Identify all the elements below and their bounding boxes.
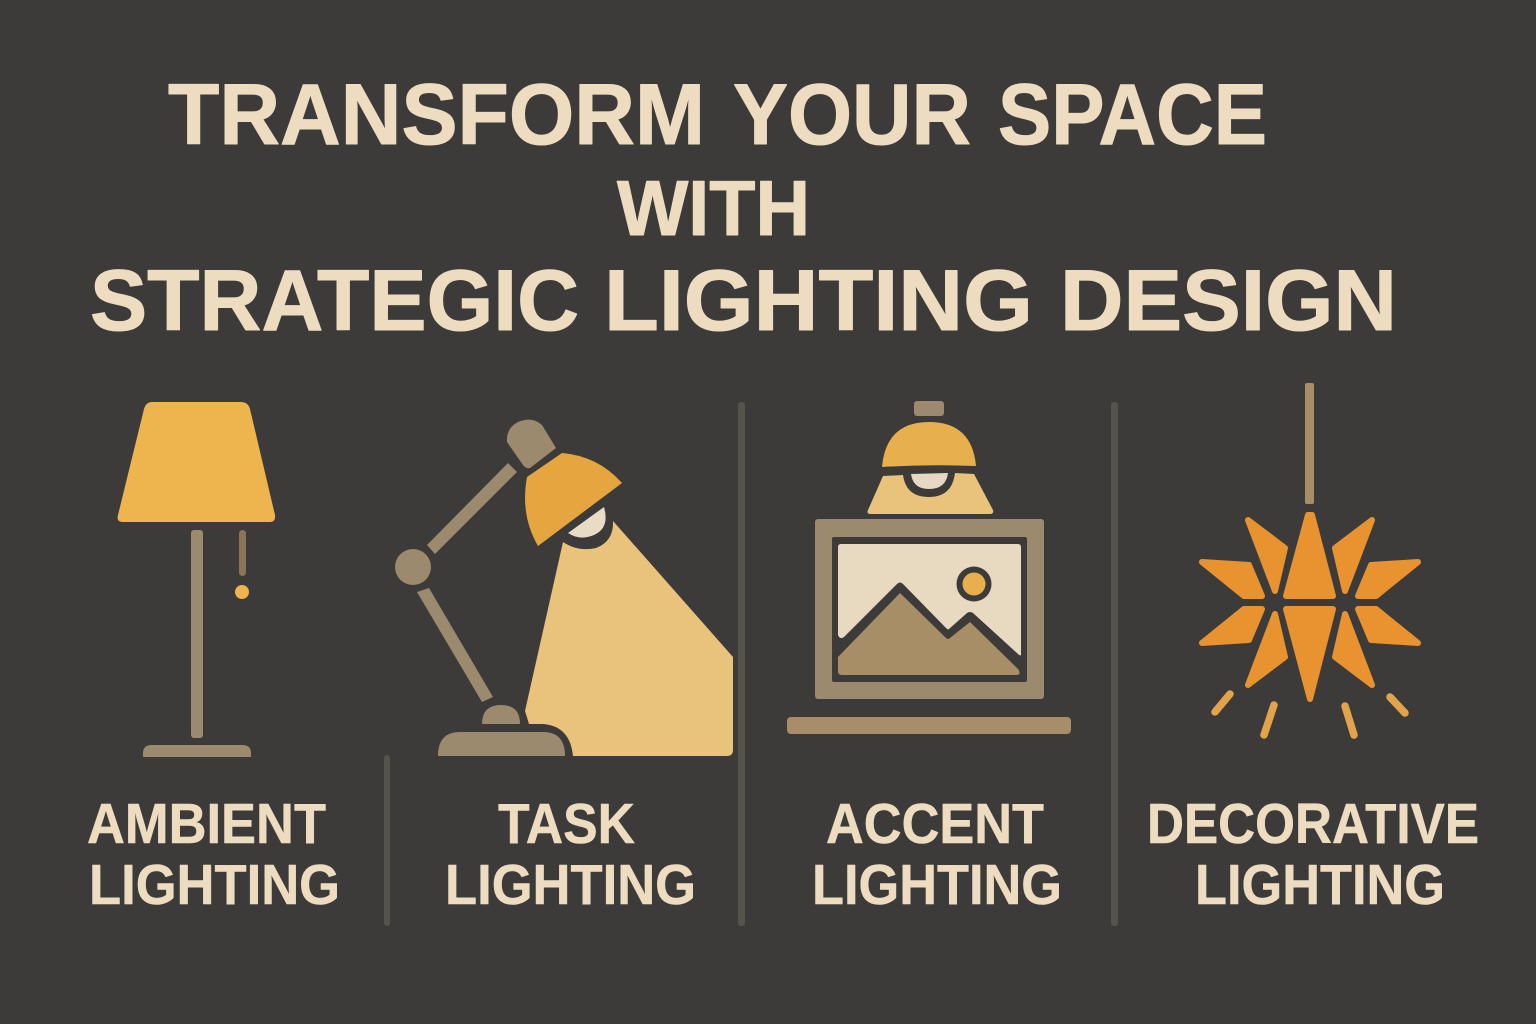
panel: accent lighting	[787, 401, 1071, 917]
icon: desk lamp	[395, 420, 733, 756]
label: decorative lighting	[1147, 792, 1479, 917]
panel: task lighting	[395, 420, 733, 917]
label: accent lighting: ACCENT	[826, 792, 1044, 856]
icon: floor lamp	[118, 402, 275, 757]
title: SPACE	[998, 67, 1267, 163]
label: accent lighting: LIGHTING	[812, 853, 1062, 917]
title	[90, 67, 1397, 349]
title: WITH	[617, 164, 810, 252]
title: DESIGN	[1060, 253, 1397, 349]
label: ambient lighting: AMBIENT	[87, 792, 326, 856]
title: LIGHTING	[604, 253, 1033, 349]
icon: star pendant	[1202, 383, 1418, 735]
title: TRANSFORM	[168, 67, 705, 163]
panel: ambient lighting	[87, 402, 340, 917]
title: STRATEGIC	[90, 253, 579, 349]
label: ambient lighting: LIGHTING	[89, 853, 340, 917]
label: task lighting: TASK	[498, 792, 635, 856]
label: task lighting: LIGHTING	[445, 853, 696, 917]
label: decorative lighting: DECORATIVE	[1147, 792, 1479, 856]
icon: picture light and framed picture	[787, 401, 1071, 734]
title: YOUR	[733, 67, 971, 163]
label: task lighting	[445, 792, 696, 917]
label: ambient lighting	[87, 792, 340, 917]
panel: decorative lighting	[1147, 383, 1479, 917]
label: accent lighting	[812, 792, 1062, 917]
label: decorative lighting: LIGHTING	[1195, 853, 1445, 917]
